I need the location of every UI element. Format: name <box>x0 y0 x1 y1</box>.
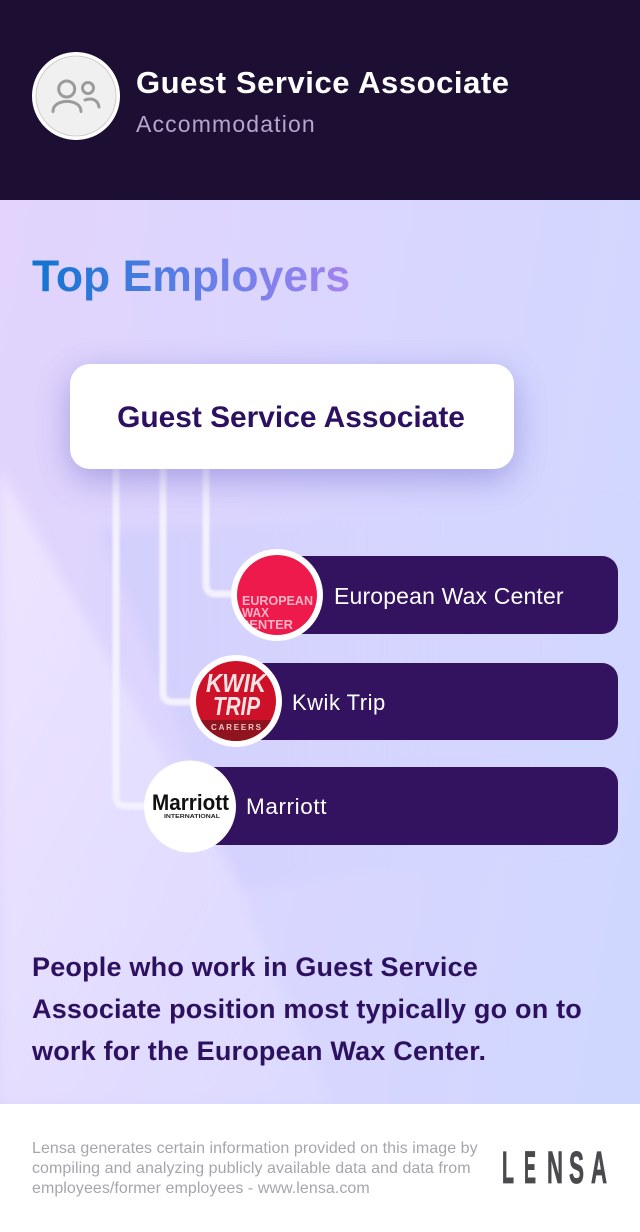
background shapes <box>0 486 199 1096</box>
summary text: People who work in Guest Service <box>32 952 478 982</box>
disclaimer text <box>32 1140 478 1196</box>
disclaimer text: employees/former employees - www.lensa.com <box>32 1180 370 1196</box>
row: Kwik Trip <box>190 655 618 747</box>
main gradient panel <box>0 200 640 1104</box>
logo: Kwik Trip: CAREERS <box>211 723 262 732</box>
logo: LENSA <box>502 1150 607 1190</box>
summary text: Associate position most typically go on to <box>32 994 582 1024</box>
disclaimer text: Lensa generates certain information provided on this image by <box>32 1140 478 1156</box>
header band <box>0 0 640 200</box>
bar <box>190 767 618 845</box>
logo: Marriott: INTERNATIONAL <box>164 814 220 820</box>
header subtitle: Accommodation <box>136 111 316 137</box>
root card label: Guest Service Associate <box>117 401 465 434</box>
logo: Kwik Trip <box>190 655 282 747</box>
icon: avatar with people <box>32 52 120 140</box>
logo: Kwik Trip: TRIP <box>213 691 261 721</box>
logo: European Wax Center: CENTER <box>240 617 294 632</box>
logo: European Wax Center: EUROPEAN <box>242 593 313 608</box>
label: Kwik Trip <box>292 690 386 715</box>
header title: Guest Service Associate <box>136 65 510 100</box>
heading: Top Employers: Top Employers <box>32 252 350 301</box>
logo: Kwik Trip: KWIK <box>206 668 268 698</box>
disclaimer text: compiling and analyzing publicly available data and data from <box>32 1160 471 1176</box>
logo: Marriott: Marriott <box>152 790 230 815</box>
row: Marriott <box>144 760 618 852</box>
label: Marriott <box>246 794 327 819</box>
bar <box>277 556 618 634</box>
bar <box>236 663 618 740</box>
label: European Wax Center <box>334 583 564 609</box>
summary text: work for the European Wax Center. <box>32 1036 486 1066</box>
footer <box>0 1104 640 1232</box>
logo: European Wax Center: WAX <box>242 605 269 620</box>
summary text <box>32 952 582 1066</box>
root card <box>70 364 514 469</box>
logo: Marriott <box>144 760 236 852</box>
row: European Wax Center <box>231 549 618 641</box>
logo: European Wax Center <box>231 549 323 641</box>
